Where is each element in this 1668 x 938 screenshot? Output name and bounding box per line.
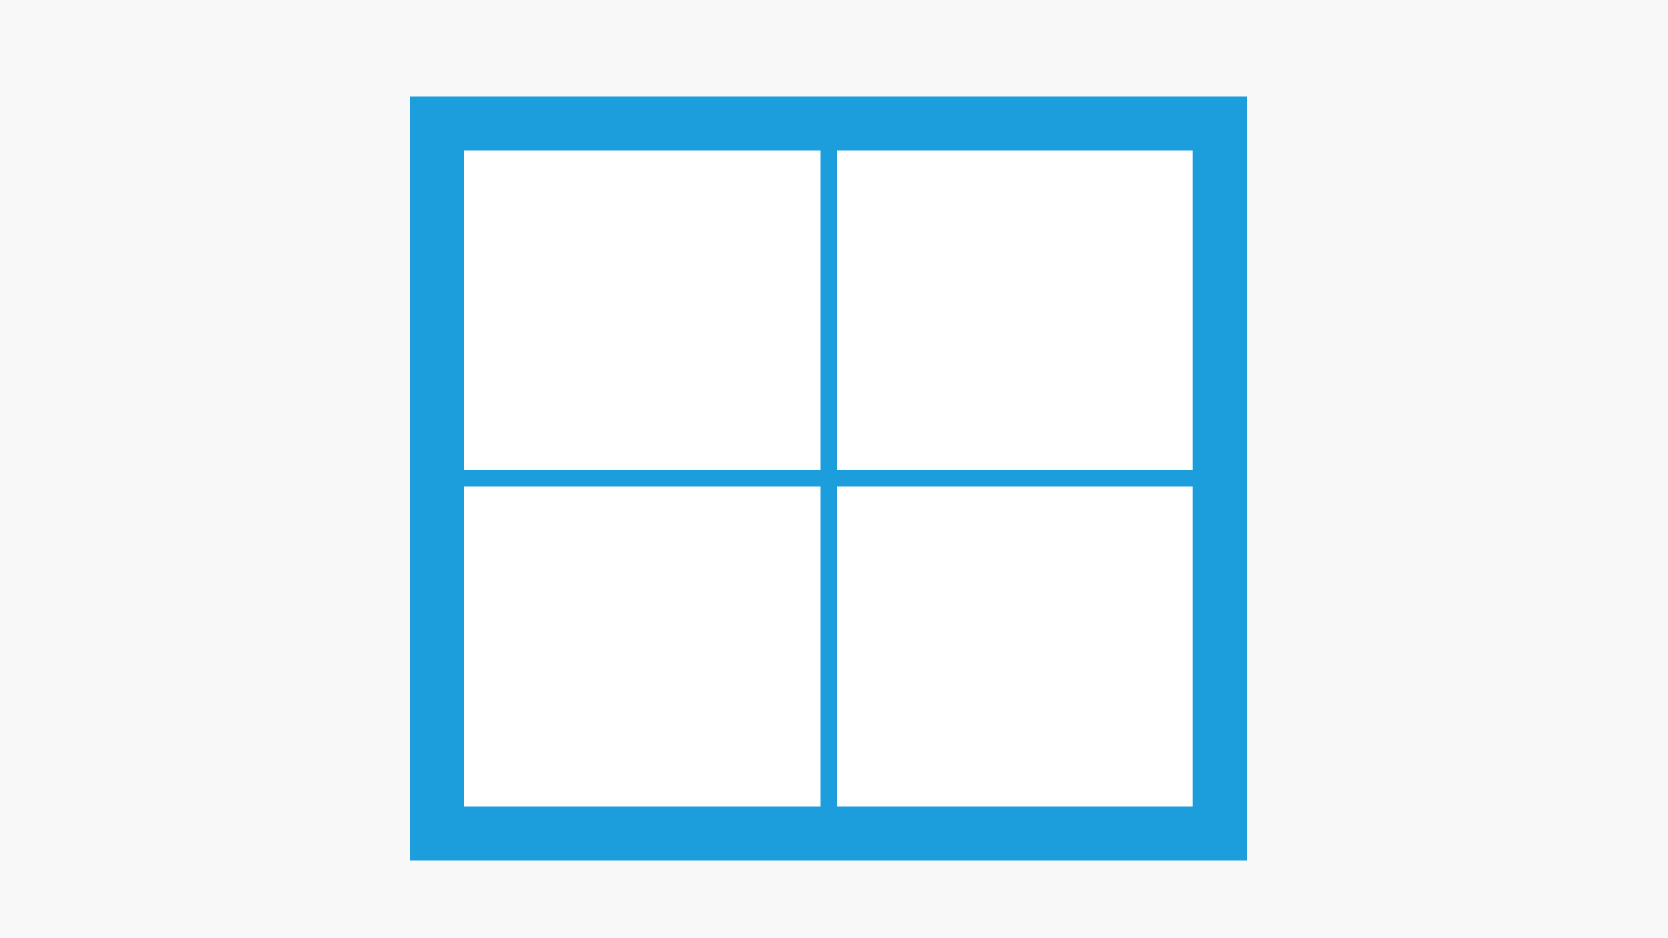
window frame <box>410 96 1247 860</box>
pane: top right <box>837 150 1193 470</box>
pane: bottom left <box>464 486 820 806</box>
pane: top left <box>464 150 820 470</box>
pane: bottom right <box>837 486 1193 806</box>
